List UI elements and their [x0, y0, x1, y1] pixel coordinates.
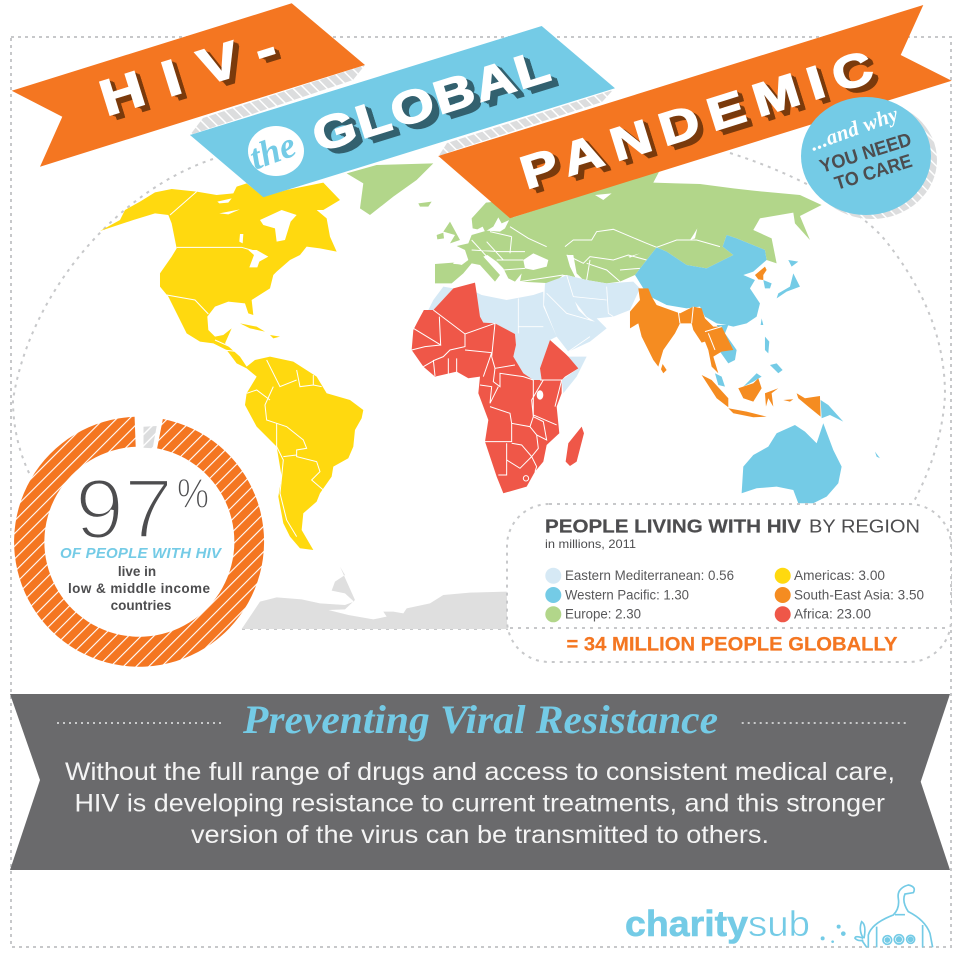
the badge: the: [244, 124, 301, 178]
banner body text: [65, 758, 895, 849]
map: Americas: [100, 183, 363, 550]
donut chart: 97 percent: 97: [75, 462, 173, 556]
map: Eastern Mediterranean: [428, 275, 640, 393]
map: Antarctica: [242, 567, 508, 629]
donut chart: 97 percent: countries: [111, 598, 171, 613]
banner body text: version of the virus can be transmitted to others.: [191, 821, 769, 849]
legend: Africa: Africa: 23.00: [794, 606, 871, 622]
map: South-East Asia: [630, 267, 821, 417]
badge: and why you need to care: YOU NEED: [817, 129, 914, 178]
banner heading: Preventing Viral Resistance: [242, 697, 718, 742]
banner: global: [190, 26, 615, 197]
donut chart: 97 percent: low & middle income: [68, 581, 210, 596]
panel: people living with HIV by region: [507, 504, 951, 662]
legend: Eastern Mediterranean: Eastern Mediterranean: 0.56: [565, 568, 734, 583]
map: Africa: [412, 283, 584, 493]
banner shadow: global: [438, 90, 613, 157]
badge: and why you need to care: [801, 97, 937, 219]
title: PANDEMIC: PANDEMIC: [514, 37, 889, 199]
map: Western Pacific: [635, 235, 880, 503]
legend: Europe: Europe: 2.30: [565, 606, 641, 622]
legend: South-East Asia: South-East Asia: 3.50: [794, 588, 924, 602]
map outline: [13, 153, 945, 629]
world map: [100, 163, 880, 629]
banner body text: HIV is developing resistance to current treatments, and this stronger: [74, 790, 885, 818]
banner: pandemic: [438, 5, 952, 218]
map: Greenland and Iceland: [347, 163, 433, 215]
logo: charitysub: charity: [625, 903, 748, 944]
legend heading: BY REGION: [809, 516, 920, 536]
donut chart: 97 percent: [11, 414, 267, 670]
badge: and why you need to care: TO CARE: [832, 151, 915, 195]
map: Europe and Central Asia: [435, 170, 822, 283]
donut chart: 97 percent: OF PEOPLE WITH HIV: [60, 545, 223, 562]
legend: Americas: Americas: 3.00: [794, 568, 885, 583]
icon: submarine: [821, 885, 933, 947]
banner: HIV: [12, 3, 365, 167]
title: HIV-: HIV-: [93, 13, 304, 127]
donut chart: 97 percent: live in: [118, 564, 156, 579]
title: GLOBAL: GLOBAL: [306, 39, 558, 162]
logo: charitysub: sub: [748, 903, 810, 944]
legend total: = 34 MILLION PEOPLE GLOBALLY: [566, 634, 898, 656]
banner shadow: HIV: [190, 65, 365, 135]
banner: preventing viral resistance: [10, 694, 950, 870]
legend heading: [545, 516, 920, 536]
legend: Western Pacific: Western Pacific: 1.30: [565, 588, 689, 602]
banner body text: Without the full range of drugs and access to consistent medical care,: [65, 758, 895, 786]
badge: and why you need to care: ...and why: [807, 101, 902, 156]
donut chart: 97 percent: %: [177, 470, 209, 517]
legend subheading: in millions, 2011: [545, 537, 636, 551]
logo: charitysub: [625, 885, 933, 947]
legend heading: PEOPLE LIVING WITH HIV: [545, 516, 802, 536]
